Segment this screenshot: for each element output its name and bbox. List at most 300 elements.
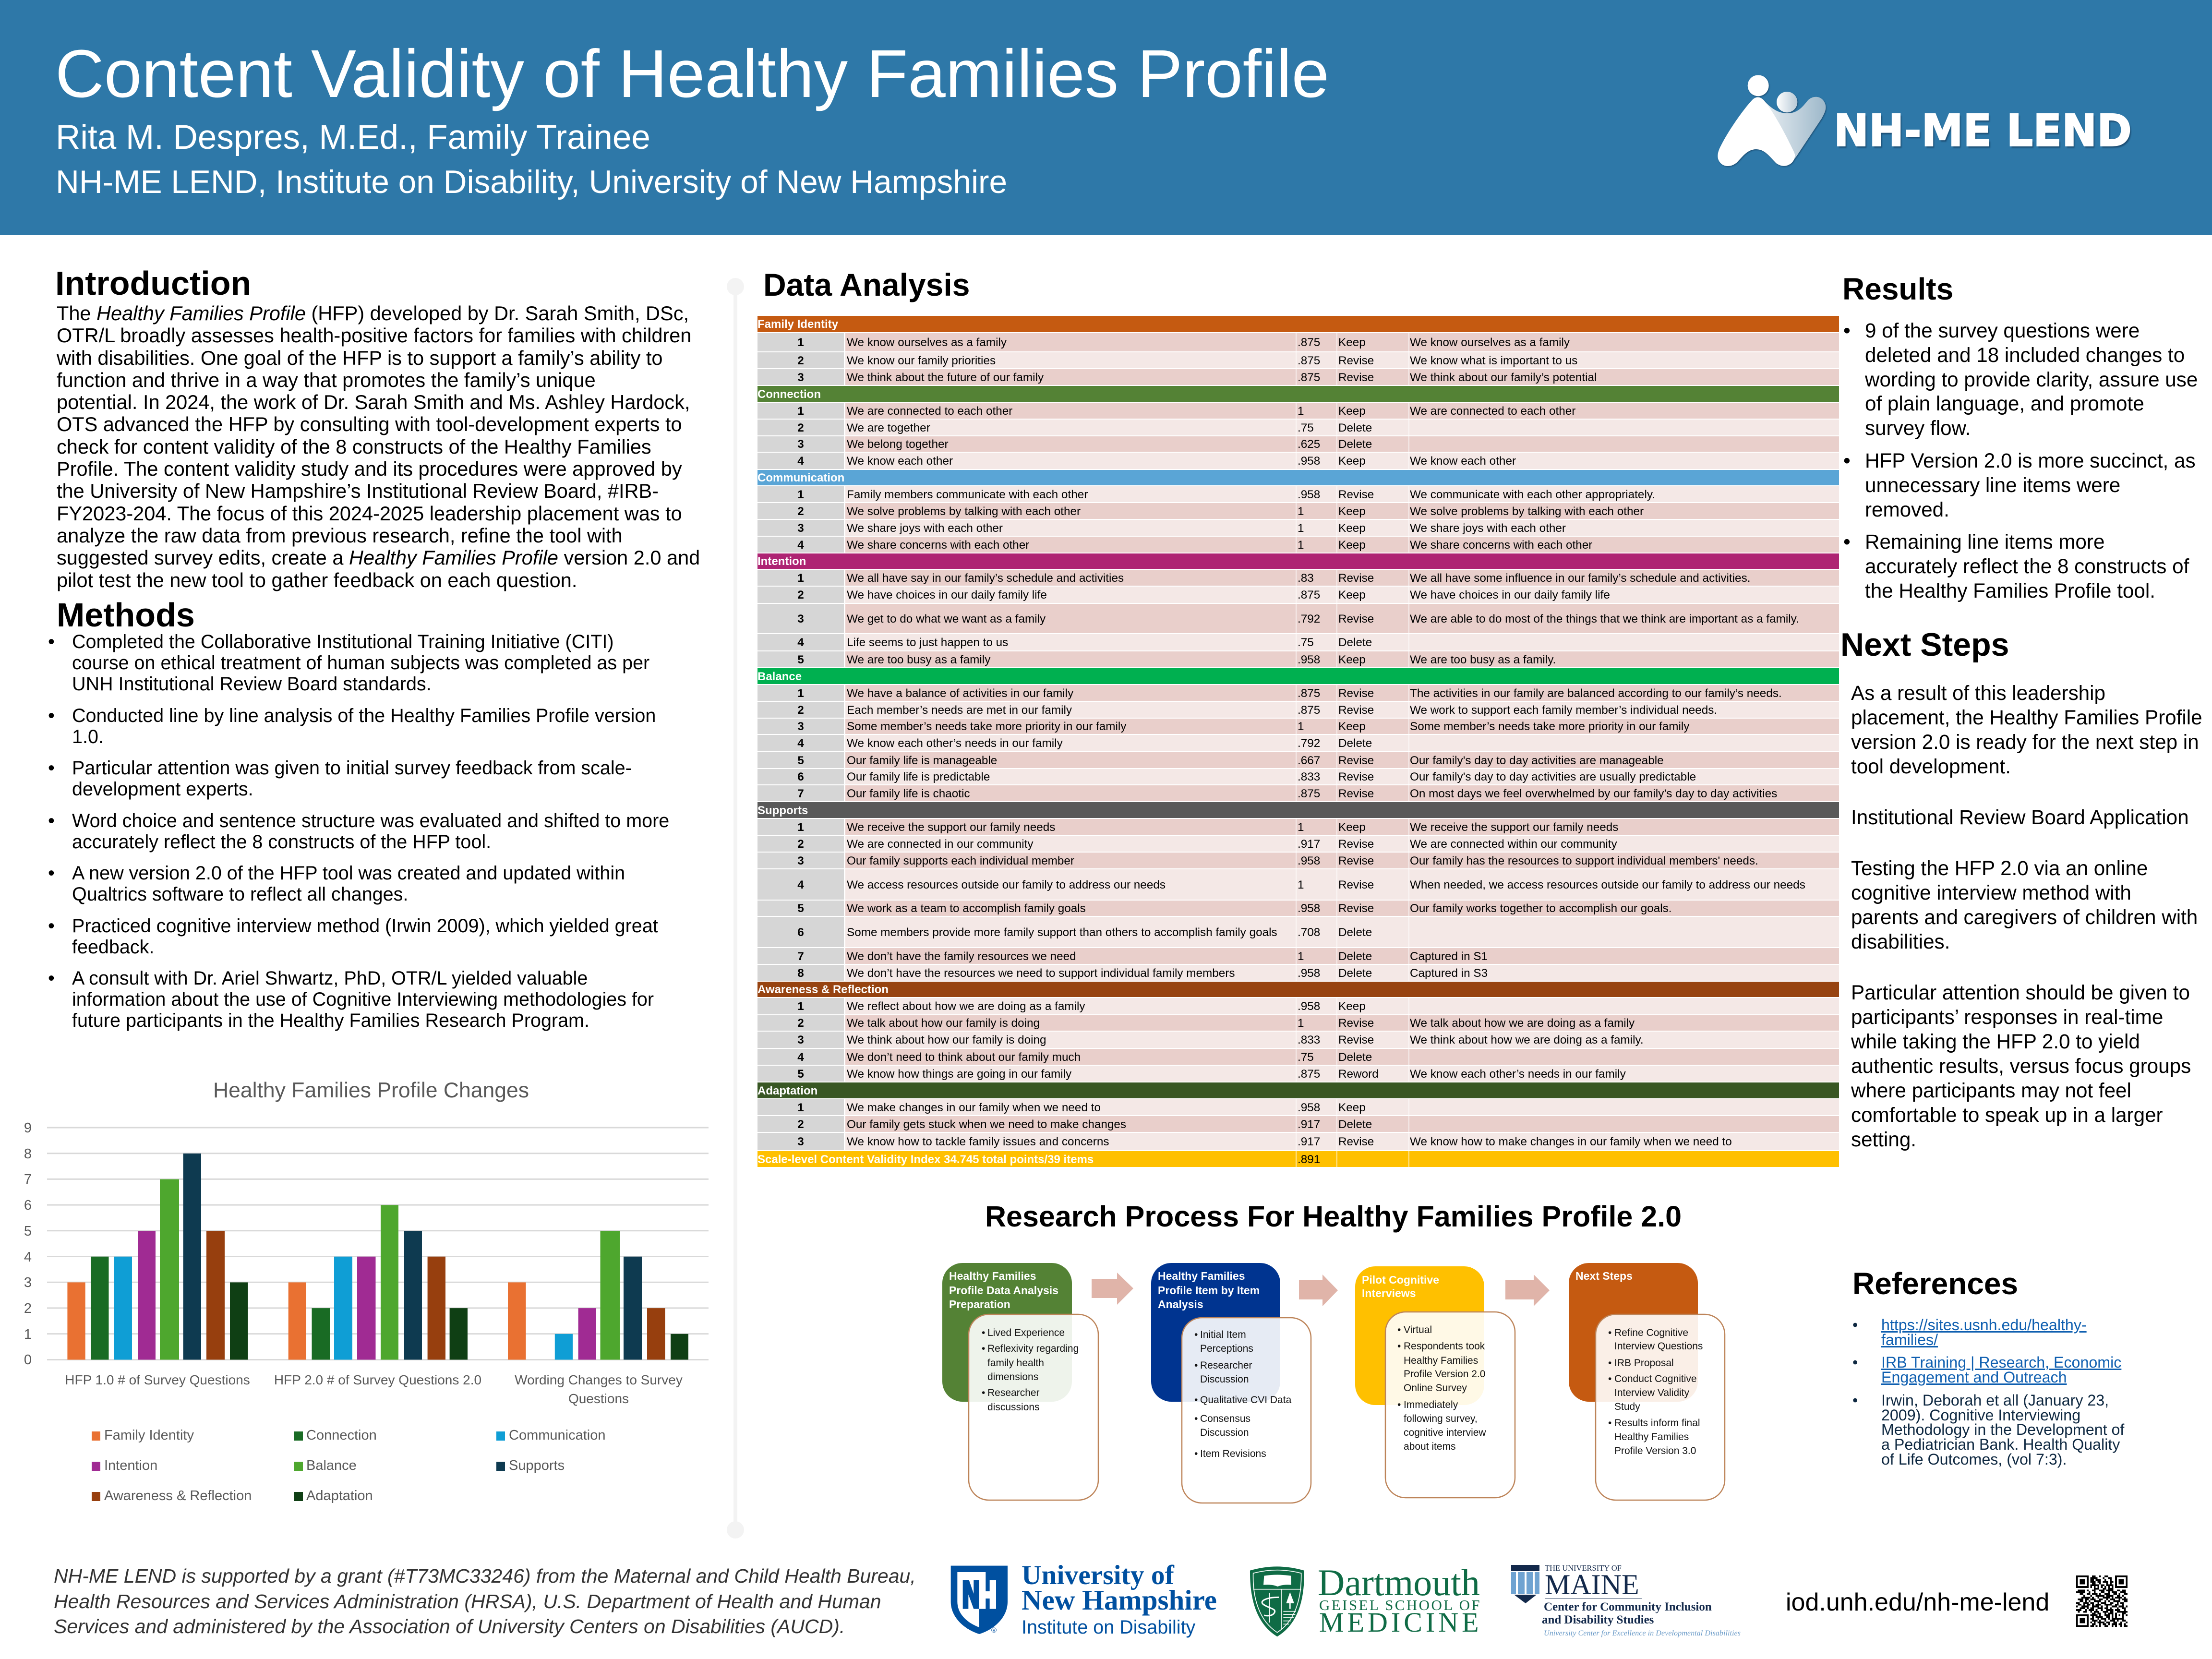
arrow 1 [1092,1273,1133,1305]
step 2: item by item analysis: Consensus [1200,1413,1250,1424]
section: Awareness & Reflection: We think about how our family is doing [847,1034,1046,1046]
section: Supports: .958 [1298,854,1320,867]
icon: Dartmouth shield [1250,1566,1304,1636]
step 2: item by item analysis: Analysis [1158,1298,1203,1310]
section: Intention: Keep [1338,589,1366,601]
step 1: data analysis preparation: • [982,1343,985,1354]
section: Supports: Delete [1338,950,1372,963]
section: Family Identity: 2 [797,354,804,367]
section: Supports: We access resources outside our family to address our needs [847,878,1166,891]
section: Balance: .875 [1298,787,1320,800]
legend [92,1428,605,1503]
section: Intention: Keep [1338,653,1366,666]
legend: Adaptation [306,1488,373,1503]
section: Supports: 1 [1298,821,1304,833]
step 3: pilot cognitive interviews: cognitive interview [1404,1427,1486,1438]
step 1: data analysis preparation [942,1263,1098,1500]
section: Intention: We all have say in our family’s schedule and activities [847,571,1124,585]
section: Connection: We are connected to each other [1410,404,1575,418]
section: Intention: 4 [797,636,804,649]
section: Awareness & Reflection: We think about how we are doing as a family. [1410,1034,1644,1046]
step 2: item by item analysis: Healthy Families [1158,1270,1245,1282]
section: Balance: Revise [1338,686,1374,700]
section: Family Identity: .875 [1298,371,1320,384]
text block: next steps: while taking the HFP 2.0 to yield [1851,1030,2140,1053]
text: • [48,968,55,989]
y axis labels [24,1120,32,1368]
section: Family Identity: .875 [1298,336,1320,349]
section: Communication: We solve problems by talking with each other [847,505,1081,517]
step 4: next steps: Healthy Families [1614,1431,1689,1443]
text: • [1843,319,1851,342]
section: Family Identity: 1 [797,336,804,349]
text block: introduction [57,302,705,591]
text block: next steps: parents and caregivers of children with [1851,906,2198,928]
text block: results list: removed. [1865,498,1949,521]
text block: introduction: FY2023-204. The focus of this 2024-2025 leadership placement was to [57,502,682,525]
step 3: pilot cognitive interviews [1355,1266,1515,1498]
section: Balance: .875 [1298,704,1320,716]
logo: Dartmouth Geisel School of Medicine: MEDICINE [1319,1607,1482,1638]
section: Intention: Intention [757,555,806,568]
section: Connection: We are connected to each other [847,404,1012,418]
section: Balance: Our family life is manageable [847,754,997,767]
category labels: Questions [568,1391,629,1406]
text block: methods list: Word choice and sentence structure was evaluated and shifted to more [72,810,669,831]
section: Family Identity: We think about the future of our family [847,371,1044,384]
logo: University of New Hampshire: New Hampshire [1022,1584,1217,1616]
section: Supports: Delete [1338,926,1372,939]
step 2: item by item analysis: • [1194,1395,1198,1406]
text block: references list [1881,1318,2208,1471]
text block: introduction: suggested survey edits, create a Healthy Families Profile version 2.0 and [57,546,700,569]
section: Awareness & Reflection: Keep [1338,1000,1366,1013]
heading: Research Process: Research Process For Healthy Families Profile 2.0 [985,1200,1682,1233]
text block: references list: a Pediatrician Bank. Health Quality [1881,1436,2120,1453]
legend: Balance [306,1458,357,1473]
heading: Next Steps: Next Steps [1840,626,2009,663]
affiliation: NH-ME LEND, Institute on Disability, University of New Hampshire [56,164,1007,200]
section: Connection: .625 [1298,438,1320,451]
section: Awareness & Reflection: Revise [1338,1034,1374,1046]
section: Awareness & Reflection: .875 [1298,1068,1320,1080]
section: Balance: On most days we feel overwhelmed by our family’s day to day activities [1410,787,1777,800]
section: Balance: We work to support each family member’s individual needs. [1410,704,1717,716]
logo: University of Maine CCIDS: MAINE [1545,1569,1639,1600]
text block: references list: Irwin, Deborah et all (January 23, [1881,1392,2109,1409]
footer: funding statement: Health Resources and Services Administration (HRSA), U.S. Department of Health and Human [54,1590,881,1612]
chart title: Healthy Families Profile Changes [213,1079,529,1102]
step 3: pilot cognitive interviews: • [1397,1399,1401,1410]
bars: HFP 1.0 [67,1154,248,1359]
section: Connection: .958 [1298,455,1320,468]
logo: Dartmouth Geisel School of Medicine: GEISEL SCHOOL OF [1319,1597,1481,1613]
y axis labels: 5 [24,1224,32,1239]
logo: University of Maine CCIDS: and Disability Studies [1542,1613,1654,1626]
section: Balance: Balance [757,670,802,683]
section: Connection: We know each other [847,455,953,468]
step 3: pilot cognitive interviews: Online Survey [1404,1382,1467,1394]
section: Intention: 3 [797,613,804,625]
section: Supports: Delete [1338,967,1372,979]
step 4: next steps: Results inform final [1614,1418,1700,1429]
text block: introduction: pilot test the new tool to gather feedback on each question. [57,569,577,591]
bars: HFP 2.0 [289,1205,468,1359]
section: Supports: We are connected in our community [847,837,1033,851]
text block: references list: https://sites.usnh.edu/healthy- [1881,1316,2087,1334]
section: Communication: Keep [1338,521,1366,535]
legend: Intention [104,1458,157,1473]
step 4: next steps: Refine Cognitive [1614,1327,1688,1338]
section: Family Identity: Keep [1338,336,1366,349]
text block: introduction: the University of New Hampshire’s Institutional Review Board, #IRB- [57,480,659,502]
section: Communication: We share joys with each other [847,521,1003,535]
section: Family Identity [757,316,1839,386]
section: Supports: Some members provide more family support than others to accomplish family goals [847,926,1277,939]
section: Balance: We have a balance of activities in our family [847,686,1073,700]
table: data analysis [757,316,1839,1167]
arrow 3 [1505,1274,1550,1306]
text block: results list: HFP Version 2.0 is more succinct, as [1865,449,2196,472]
section: Family Identity: Revise [1338,354,1374,367]
section: Adaptation: Keep [1338,1101,1366,1114]
section: Adaptation: .958 [1298,1101,1320,1114]
section: Intention: We have choices in our daily family life [1410,589,1610,601]
text block: methods list: UNH Institutional Review Board standards. [72,673,432,695]
text block: methods list: course on ethical treatment of human subjects was completed as per [72,652,649,673]
step 1: data analysis preparation: family health [987,1358,1044,1369]
text: • [1843,449,1851,472]
section: Awareness & Reflection: 4 [797,1050,804,1064]
text block: next steps: disabilities. [1851,930,1950,953]
text block: results list: unnecessary line items were [1865,474,2120,496]
text block: methods list: accurately reflect the 8 constructs of the HFP tool. [72,831,491,853]
section: Intention: Life seems to just happen to us [847,636,1008,649]
section: Supports: 1 [1298,950,1304,963]
text block: methods list: feedback. [72,936,154,957]
text block: results list [1865,319,2201,612]
step 3: pilot cognitive interviews: Interviews [1362,1287,1416,1299]
legend: Connection [306,1428,377,1443]
section: Adaptation: 1 [797,1101,804,1114]
section: Adaptation: Delete [1338,1118,1372,1131]
text block: references list: of Life Outcomes, (vol 7:3). [1881,1451,2067,1468]
section: Balance: Revise [1338,787,1374,800]
text block: introduction: function and thrive in a way that promotes the family’s unique [57,369,596,391]
section: Balance: .667 [1298,754,1320,767]
section: Balance: Revise [1338,770,1374,783]
text block: next steps: Particular attention should be given to [1851,981,2190,1004]
logo: University of New Hampshire [941,1555,1229,1647]
step 4: next steps: IRB Proposal [1614,1358,1674,1369]
text block: references list: 2009). Cognitive Interviewing [1881,1407,2080,1424]
category labels: HFP 1.0 # of Survey Questions [65,1372,250,1387]
section: Balance: 3 [797,720,804,733]
step 3: pilot cognitive interviews: • [1397,1324,1401,1335]
y axis labels: 0 [24,1352,32,1368]
step 2: item by item analysis: Item Revisions [1200,1448,1266,1459]
section: Supports: Revise [1338,902,1374,915]
heading: Introduction: Introduction [55,264,251,302]
heading: Methods: Methods [57,596,195,634]
title: Content Validity of Healthy Families Profile [55,36,1329,111]
y axis labels: 4 [24,1250,32,1265]
section: Supports: When needed, we access resources outside our family to address our needs [1410,878,1805,891]
y axis labels: 2 [24,1301,32,1316]
section: Awareness & Reflection: We reflect about how we are doing as a family [847,1000,1085,1013]
step 2: item by item analysis: Profile Item by Item [1158,1284,1260,1297]
section: Communication: Keep [1338,505,1366,517]
text block: references list: Methodology in the Development of [1881,1421,2124,1438]
section: Awareness & Reflection: 1 [797,1000,804,1013]
y axis labels: 8 [24,1146,32,1162]
step 1: data analysis preparation: Healthy Families [949,1270,1036,1282]
section: Awareness & Reflection: 5 [797,1068,804,1080]
icon: Maine shield [1511,1565,1539,1603]
section: Awareness & Reflection: We don’t need to think about our family much [847,1050,1081,1064]
step 3: pilot cognitive interviews: Respondents took [1404,1341,1485,1352]
heading: Data Analysis: Data Analysis [763,267,970,302]
text block: next steps: Testing the HFP 2.0 via an online [1851,857,2148,879]
step 4: next steps: • [1608,1418,1611,1429]
text block: methods list: information about the use of Cognitive Interviewing methodologies for [72,989,654,1010]
header banner [0,0,2212,235]
step 1: data analysis preparation: Reflexivity regarding [987,1343,1079,1354]
section: Awareness & Reflection: Reword [1338,1068,1379,1080]
section: Adaptation: .917 [1298,1118,1320,1131]
text: • [1852,1316,1858,1334]
step 4: next steps: Study [1614,1401,1640,1412]
section: Communication: 1 [1298,539,1304,551]
logo: University of Maine CCIDS [1507,1560,1743,1642]
step 3: pilot cognitive interviews: following survey, [1404,1413,1478,1424]
section: Supports [757,802,1839,982]
section: Adaptation: We make changes in our family when we need to [847,1101,1101,1114]
section: Communication: 1 [1298,505,1304,517]
logo: Dartmouth Geisel School of Medicine [1243,1555,1488,1647]
text block: introduction: The Healthy Families Profile (HFP) developed by Dr. Sarah Smith, DSc, [57,302,689,325]
text block: introduction: OTS advanced the HFP by consulting with tool-development experts to [57,413,682,435]
section: Supports: Revise [1338,878,1374,891]
step 1: data analysis preparation: dimensions [987,1371,1038,1382]
text block: next steps: participants’ responses in real-time [1851,1006,2163,1028]
section: Balance: 5 [797,754,804,767]
text block: introduction: OTR/L broadly assesses health-positive factors for families with children [57,324,691,347]
text block: introduction: check for content validity of the 8 constructs of the Healthy Families [57,435,651,458]
step 3: pilot cognitive interviews: Immediately [1404,1399,1458,1410]
step 4: next steps: Next Steps [1575,1270,1633,1282]
section: Adaptation: 3 [797,1135,804,1148]
text block: results list: Remaining line items more [1865,530,2104,553]
text block: methods list: 1.0. [72,726,104,747]
text block: next steps [1851,681,2206,1163]
section: Connection: Delete [1338,421,1372,434]
step 2: item by item analysis [1151,1263,1311,1503]
section: Family Identity: We think about our family’s potential [1410,371,1597,384]
section: Awareness & Reflection: Delete [1338,1050,1372,1064]
section: Connection: Keep [1338,455,1366,468]
section: Intention: We all have some influence in our family’s schedule and activities. [1410,571,1750,585]
heading: Results: Results [1842,272,1953,306]
logo: University of New Hampshire: University of [1022,1560,1175,1590]
section: Communication: We solve problems by talking with each other [1410,505,1644,517]
section: Supports: 6 [797,926,804,939]
step 3: pilot cognitive interviews: Pilot Cognitive [1362,1274,1439,1286]
section: Supports: .917 [1298,837,1320,851]
section: Intention: 1 [797,571,804,585]
logo: University of Maine CCIDS: University Center for Excellence in Developmental Disabilities [1544,1629,1741,1637]
section: Intention: .792 [1298,613,1320,625]
section: Communication: 3 [797,521,804,535]
text block: next steps: Institutional Review Board Application [1851,806,2189,829]
section: Intention: We get to do what we want as a family [847,613,1046,625]
section: Adaptation: 2 [797,1118,804,1131]
section: Supports: Captured in S3 [1410,967,1488,979]
section: Intention: .875 [1298,589,1320,601]
section: Communication: Revise [1338,488,1374,501]
bar chart: Healthy Families Profile Changes [19,1070,720,1517]
text block: results list: accurately reflect the 8 constructs of [1865,555,2189,577]
section: Intention: We have choices in our daily family life [847,589,1047,601]
section: Intention: .958 [1298,653,1320,666]
section: Balance: We know each other’s needs in our family [847,737,1063,750]
step 2: item by item analysis: Initial Item [1200,1329,1246,1340]
section: Connection: We are together [847,421,930,434]
text: • [48,810,55,831]
footer: funding statement: Services and administered by the Association of University Centers on Disabilities (AUCD). [54,1615,845,1637]
step 4: next steps: • [1608,1358,1611,1369]
section: Balance: The activities in our family are balanced according to our family’s needs. [1410,686,1782,700]
footer: funding statement: NH-ME LEND is supported by a grant (#T73MC33246) from the Maternal and Child Health Bureau, [54,1565,916,1587]
step 3: pilot cognitive interviews: Virtual [1404,1324,1432,1335]
section: Family Identity: We know ourselves as a family [847,336,1007,349]
category labels: HFP 2.0 # of Survey Questions 2.0 [274,1372,481,1387]
section: Communication [757,470,1839,553]
section: Family Identity: Family Identity [757,318,838,331]
section: Connection: Connection [757,388,821,400]
text block: methods list: Particular attention was given to initial survey feedback from scale- [72,757,632,779]
section: Communication: We share concerns with each other [1410,539,1592,551]
text: • [48,757,55,779]
step 4: next steps: Interview Validity [1614,1387,1690,1398]
text: • [1843,530,1851,553]
logo: Dartmouth Geisel School of Medicine: Dartmouth [1318,1562,1480,1603]
section: Balance: 7 [797,787,804,800]
section: Supports: Our family works together to accomplish our goals. [1410,902,1672,915]
text block: introduction: with disabilities. One goal of the HFP is to support a family’s ability to [57,347,663,369]
section: Connection: Keep [1338,404,1366,418]
logo wordmark: NH-ME LEND [1834,105,2132,156]
total row: scale-level content validity index: .891 [1298,1153,1320,1166]
logo: University of New Hampshire: Institute on Disability [1022,1617,1196,1638]
legend: Awareness & Reflection [104,1488,252,1503]
step 3: pilot cognitive interviews: • [1397,1341,1401,1352]
section: Intention [757,553,1839,668]
section: Balance: Our family's day to day activities are manageable [1410,754,1664,767]
section: Balance: Some member’s needs take more priority in our family [1410,720,1689,733]
section: Supports: 1 [1298,878,1304,891]
section: Balance: 1 [1298,720,1304,733]
section: Communication: 1 [797,488,804,501]
section: Supports: We don’t have the family resources we need [847,950,1076,963]
section: Connection: 3 [797,438,804,451]
section: Supports: We don’t have the resources we need to support individual family members [847,967,1235,979]
text block: methods list [72,631,691,1040]
text block: references list: Engagement and Outreach [1881,1369,2067,1386]
section: Awareness & Reflection: We talk about how we are doing as a family [1410,1017,1635,1030]
section: Awareness & Reflection: Revise [1338,1017,1374,1030]
text block: results list: wording to provide clarity, assure use [1865,368,2198,391]
logo: University of Maine CCIDS: Center for Community Inclusion [1544,1600,1712,1613]
section: Supports: We work as a team to accomplish family goals [847,902,1086,915]
section: Communication: We share concerns with each other [847,539,1029,551]
section: Connection: We know each other [1410,455,1516,468]
y axis labels: 3 [24,1275,32,1290]
category labels: Wording Changes to Survey [515,1372,683,1387]
section: Balance: Revise [1338,704,1374,716]
heading: References: References [1852,1266,2018,1301]
text block: results list: deleted and 18 included changes to [1865,344,2185,366]
y axis labels: 7 [24,1172,32,1187]
section: Awareness & Reflection: We talk about how our family is doing [847,1017,1040,1030]
section: Balance: 4 [797,737,804,750]
section: Connection: 4 [797,455,804,468]
text block: methods list: Completed the Collaborative Institutional Training Initiative (CITI) [72,631,613,652]
section: Balance: .875 [1298,686,1320,700]
section: Balance: .792 [1298,737,1320,750]
text block: results list: survey flow. [1865,417,1971,439]
text block: next steps: cognitive interview method with [1851,881,2131,904]
section: Family Identity: .875 [1298,354,1320,367]
footer: website url: iod.unh.edu/nh-me-lend [1786,1588,2049,1616]
step 2: item by item analysis: Researcher [1200,1360,1252,1371]
section: Balance: Delete [1338,737,1372,750]
section: Supports: .958 [1298,967,1320,979]
section: Balance: Our family's day to day activities are usually predictable [1410,770,1696,783]
section: Communication: We communicate with each other appropriately. [1410,488,1655,501]
section: Connection: 1 [797,404,804,418]
section: Supports: 8 [797,967,804,979]
section: Awareness & Reflection: We know how things are going in our family [847,1068,1071,1080]
section: Intention: 2 [797,589,804,601]
text block: next steps: tool development. [1851,755,2011,778]
text block: next steps: comfortable to speak up in a larger [1851,1104,2163,1126]
section: Supports: 1 [797,821,804,833]
step 3: pilot cognitive interviews: Healthy Families [1404,1355,1478,1366]
section: Supports: We receive the support our family needs [847,821,1055,833]
text block: methods list: A new version 2.0 of the HFP tool was created and updated within [72,863,625,884]
step 4: next steps: Interview Questions [1614,1341,1703,1352]
icon: UNH shield [951,1566,1008,1634]
section: Awareness & Reflection: .958 [1298,1000,1320,1013]
section: Family Identity: Revise [1338,371,1374,384]
text block: references list: IRB Training | Research, Economic [1881,1354,2121,1371]
section: Balance: Each member’s needs are met in our family [847,704,1072,716]
section: Communication: Keep [1338,539,1366,551]
text block: methods list: Conducted line by line analysis of the Healthy Families Profile version [72,705,656,726]
step 1: data analysis preparation: Lived Experience [987,1327,1065,1338]
legend: Supports [509,1458,565,1473]
section: Intention: We are able to do most of the things that we think are important as a family. [1410,613,1799,625]
step 2: item by item analysis: • [1194,1329,1198,1340]
section: Supports: .958 [1298,902,1320,915]
step 2: item by item analysis: Perceptions [1200,1343,1253,1354]
step 3: pilot cognitive interviews: about items [1404,1441,1456,1452]
section: Family Identity: 3 [797,371,804,384]
step 4: next steps [1569,1263,1725,1500]
step 2: item by item analysis: Discussion [1200,1427,1249,1438]
section: Awareness & Reflection: 2 [797,1017,804,1030]
